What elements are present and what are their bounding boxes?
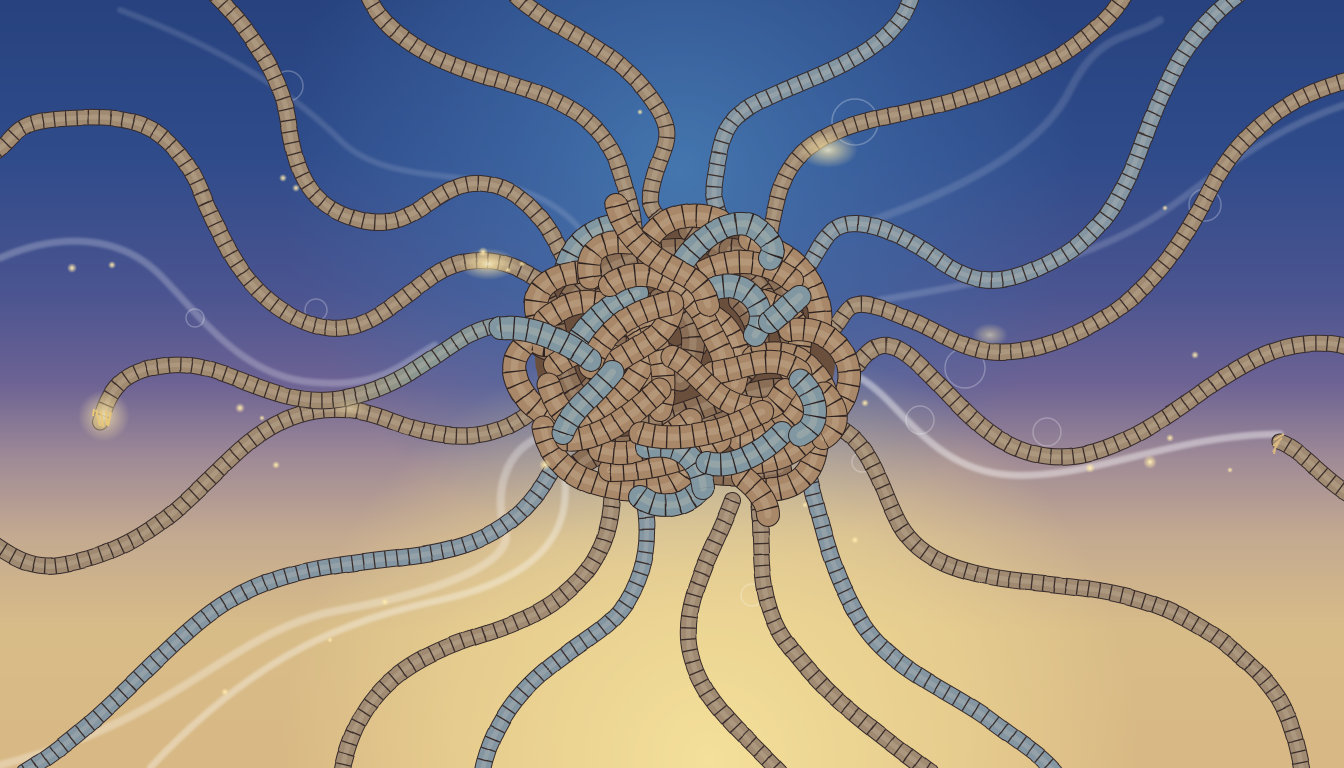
rope: bottom blue [482, 495, 647, 768]
rope: frayed right stub [1280, 442, 1344, 495]
rope: top left [368, 0, 640, 250]
rope: bottom tan left [342, 495, 612, 768]
rope: left upper tan [0, 117, 550, 329]
rope: bottom right blue [808, 472, 1055, 768]
rope: top centre [515, 0, 667, 225]
rope: right upper tan [832, 80, 1344, 353]
rope: top right tan [768, 0, 1125, 242]
small ring accents [186, 71, 1221, 606]
rope: lower right long [835, 425, 1302, 768]
frayed end: right [1273, 434, 1284, 454]
rope: left lower tan [0, 409, 530, 566]
floating sparkles [67, 109, 1233, 696]
rope: bottom tan right [755, 475, 930, 768]
rope: left frayed blue to tan [100, 325, 540, 422]
rope: right middle tan [858, 343, 1344, 457]
rope: bottom tan centre [688, 500, 780, 768]
rope: top blue [713, 0, 912, 220]
central knot of tangled rope [500, 205, 849, 515]
rope: upper left long [215, 0, 570, 268]
frayed end: left, glowing [78, 390, 130, 442]
glowing highlights on ropes [330, 132, 1008, 418]
rope: upper right blue [805, 0, 1238, 280]
rope: lower left blue [25, 465, 555, 768]
